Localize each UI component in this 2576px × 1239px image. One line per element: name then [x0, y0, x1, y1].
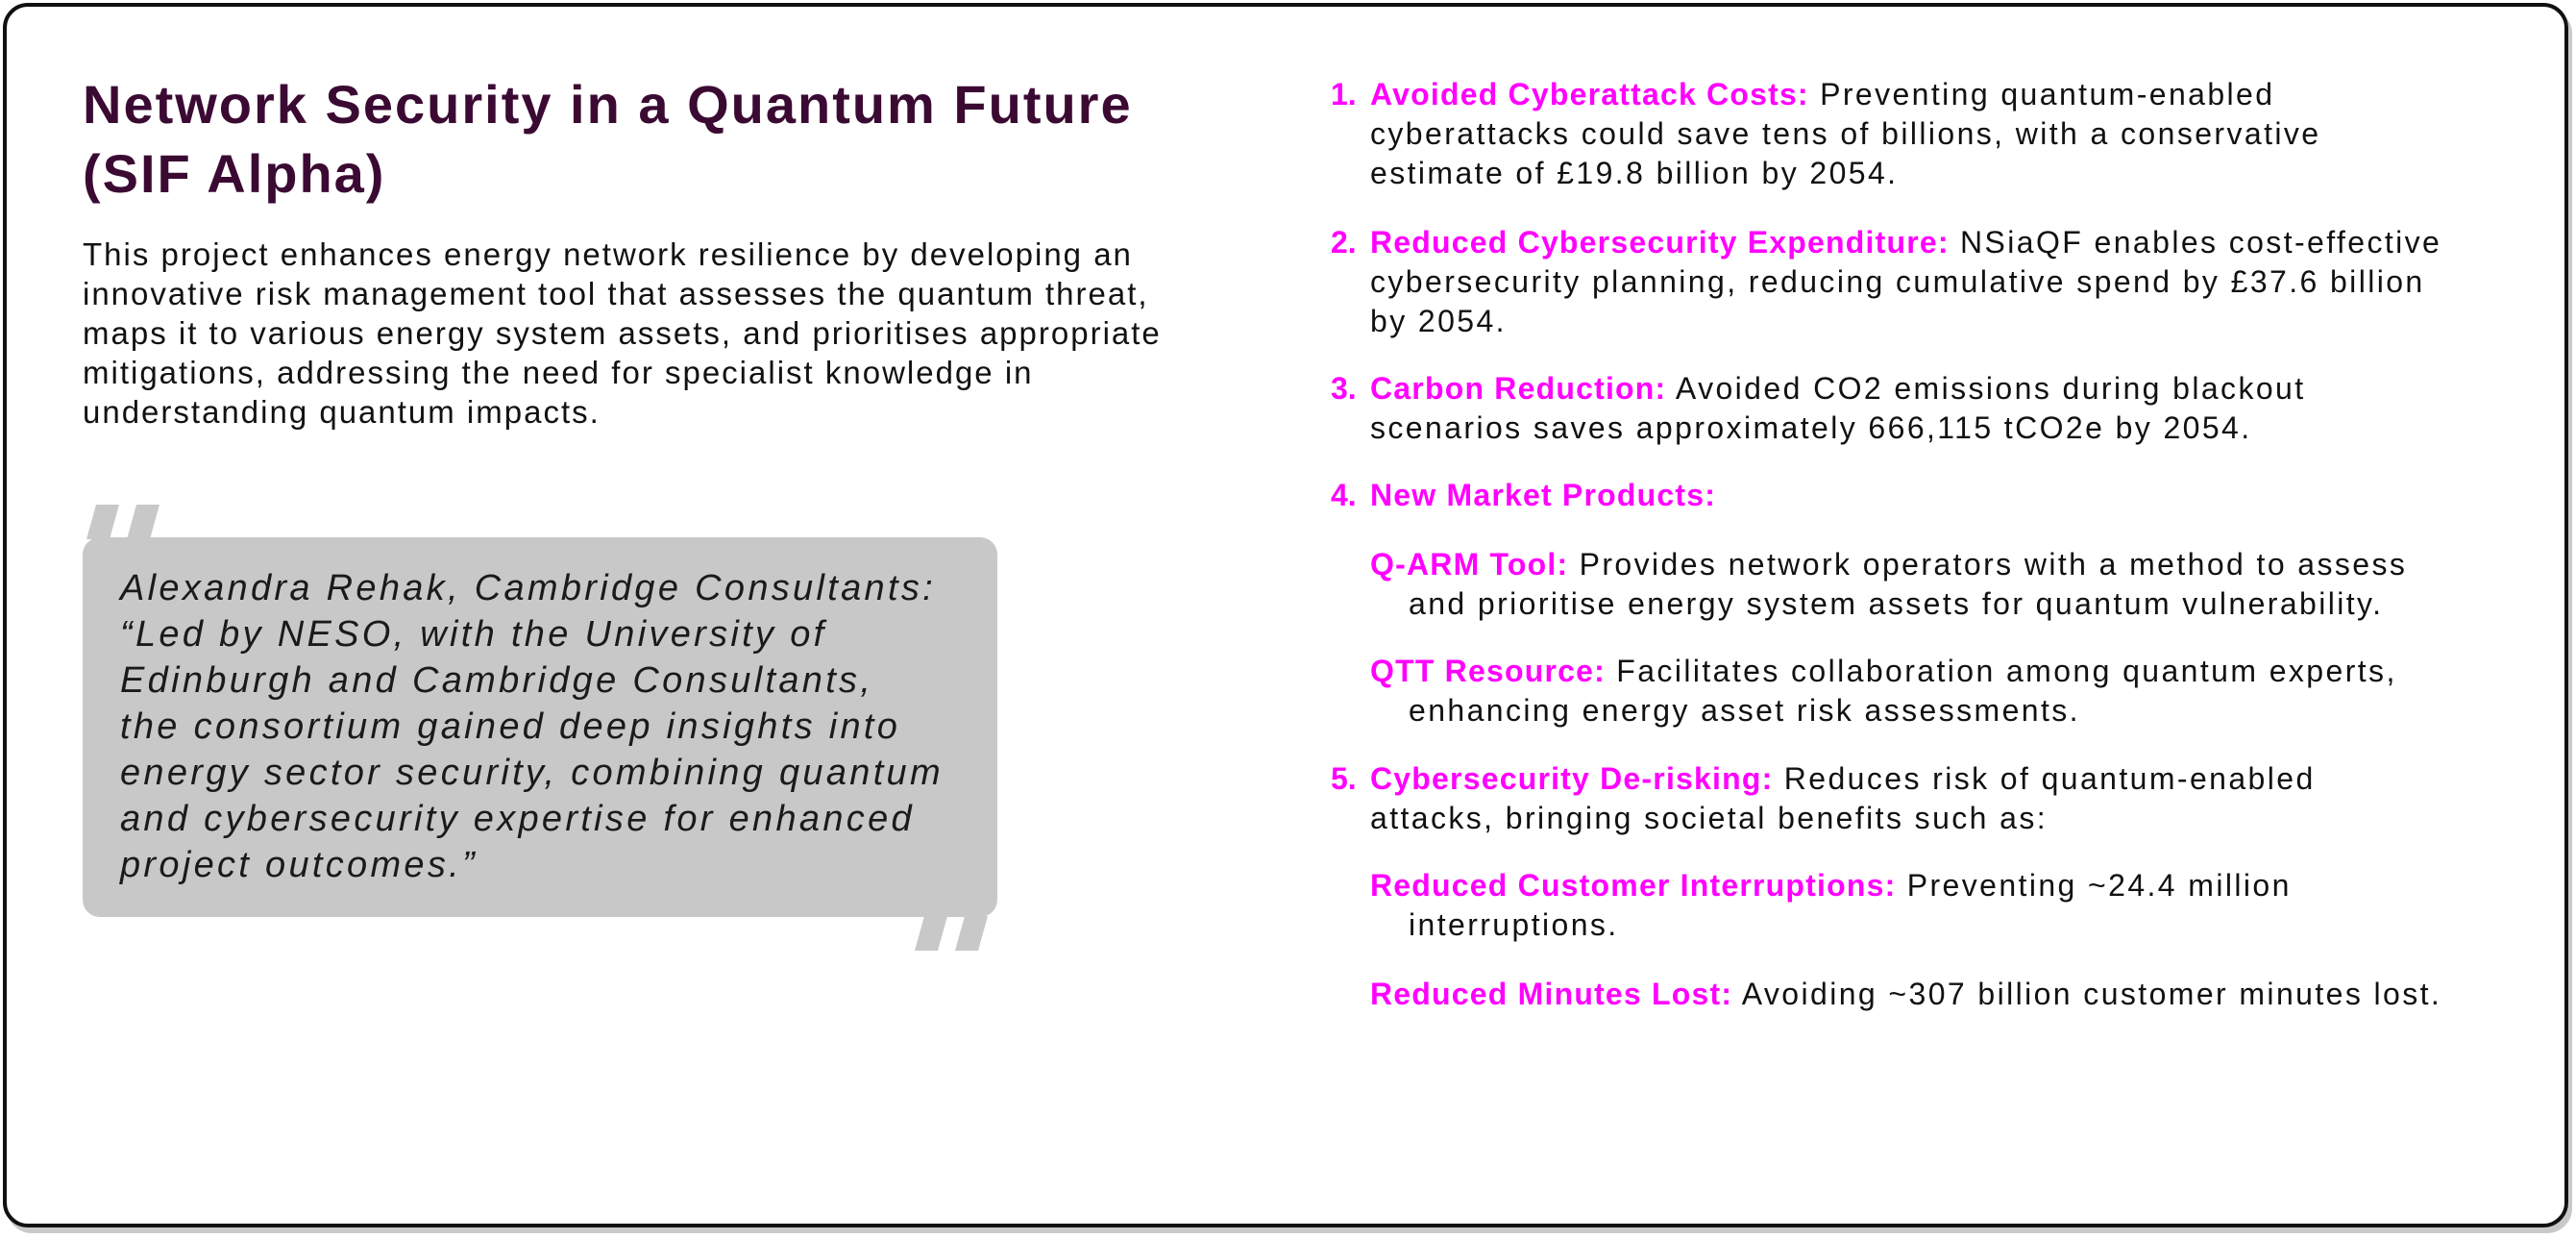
sub-item minutes lost: Reduced Minutes Lost: Avoiding ~307 billion customer minutes lost.: [1370, 977, 2441, 1011]
intro paragraph: innovative risk management tool that assesses the quantum threat,: [83, 276, 1149, 311]
item 2: cybersecurity planning, reducing cumulative spend by £37.6 billion: [1370, 264, 2425, 299]
quote text: “Led by NESO, with the University of: [120, 614, 826, 655]
icon: opening quote mark: [86, 505, 159, 539]
sub-item QTT: enhancing energy asset risk assessments.: [1409, 693, 2080, 728]
quote text: and cybersecurity expertise for enhanced: [120, 799, 915, 839]
intro paragraph: [83, 236, 1162, 430]
intro paragraph: understanding quantum impacts.: [83, 394, 601, 430]
item 5: Cybersecurity De-risking: Reduces risk of quantum-enabled: [1370, 761, 2316, 796]
item 1: estimate of £19.8 billion by 2054.: [1370, 156, 1898, 190]
item 3: Carbon Reduction: Avoided CO2 emissions during blackout: [1370, 371, 2306, 406]
quote text: Edinburgh and Cambridge Consultants,: [120, 660, 873, 701]
sub-item QTT: QTT Resource: Facilitates collaboration among quantum experts,: [1370, 654, 2397, 688]
item 3: [1331, 371, 2306, 445]
item 1: cyberattacks could save tens of billions, with a conservative: [1370, 116, 2320, 151]
sub-item Q-ARM: Q-ARM Tool: Provides network operators with a method to assess: [1370, 547, 2407, 582]
sub-item interruptions: interruptions.: [1409, 907, 1619, 942]
item 1: [1331, 77, 2320, 190]
sub-item interruptions: Reduced Customer Interruptions: Preventing ~24.4 million: [1370, 868, 2292, 903]
sub-item Q-ARM: and prioritise energy system assets for quantum vulnerability.: [1409, 586, 2383, 621]
item 2: [1331, 225, 2441, 338]
quote text: energy sector security, combining quantum: [120, 753, 944, 793]
item 4: 4.: [1331, 478, 1357, 512]
callout: quote box: [83, 537, 997, 917]
sub-item interruptions: [1370, 868, 2292, 942]
item 1: Avoided Cyberattack Costs: Preventing quantum-enabled: [1370, 77, 2274, 112]
title: Network Security in a Quantum Future: [83, 74, 1133, 135]
item 2: 2.: [1331, 225, 1357, 260]
quote text: [118, 568, 944, 885]
title: [83, 74, 1133, 204]
icon: closing quote mark: [915, 916, 988, 951]
intro paragraph: mitigations, addressing the need for specialist knowledge in: [83, 355, 1034, 390]
title: (SIF Alpha): [83, 143, 385, 204]
item 5: [1331, 761, 2316, 835]
item 2: Reduced Cybersecurity Expenditure: NSiaQF enables cost-effective: [1370, 225, 2441, 260]
intro paragraph: This project enhances energy network resilience by developing an: [83, 236, 1133, 272]
sub-item QTT: [1370, 654, 2397, 728]
item 3: scenarios saves approximately 666,115 tCO2e by 2054.: [1370, 410, 2252, 445]
quote text: the consortium gained deep insights into: [120, 706, 900, 747]
quote text: Alexandra Rehak, Cambridge Consultants:: [120, 568, 936, 608]
item 3: 3.: [1331, 371, 1357, 406]
item 1: 1.: [1331, 77, 1357, 112]
item 5: attacks, bringing societal benefits such as:: [1370, 801, 2048, 835]
intro paragraph: maps it to various energy system assets, and prioritises appropriate: [83, 315, 1162, 351]
item 2: by 2054.: [1370, 304, 1507, 338]
quote text: project outcomes.”: [120, 845, 478, 885]
item 4: New Market Products:: [1370, 478, 1716, 512]
sub-item Q-ARM: [1370, 547, 2407, 621]
item 5: 5.: [1331, 761, 1357, 796]
